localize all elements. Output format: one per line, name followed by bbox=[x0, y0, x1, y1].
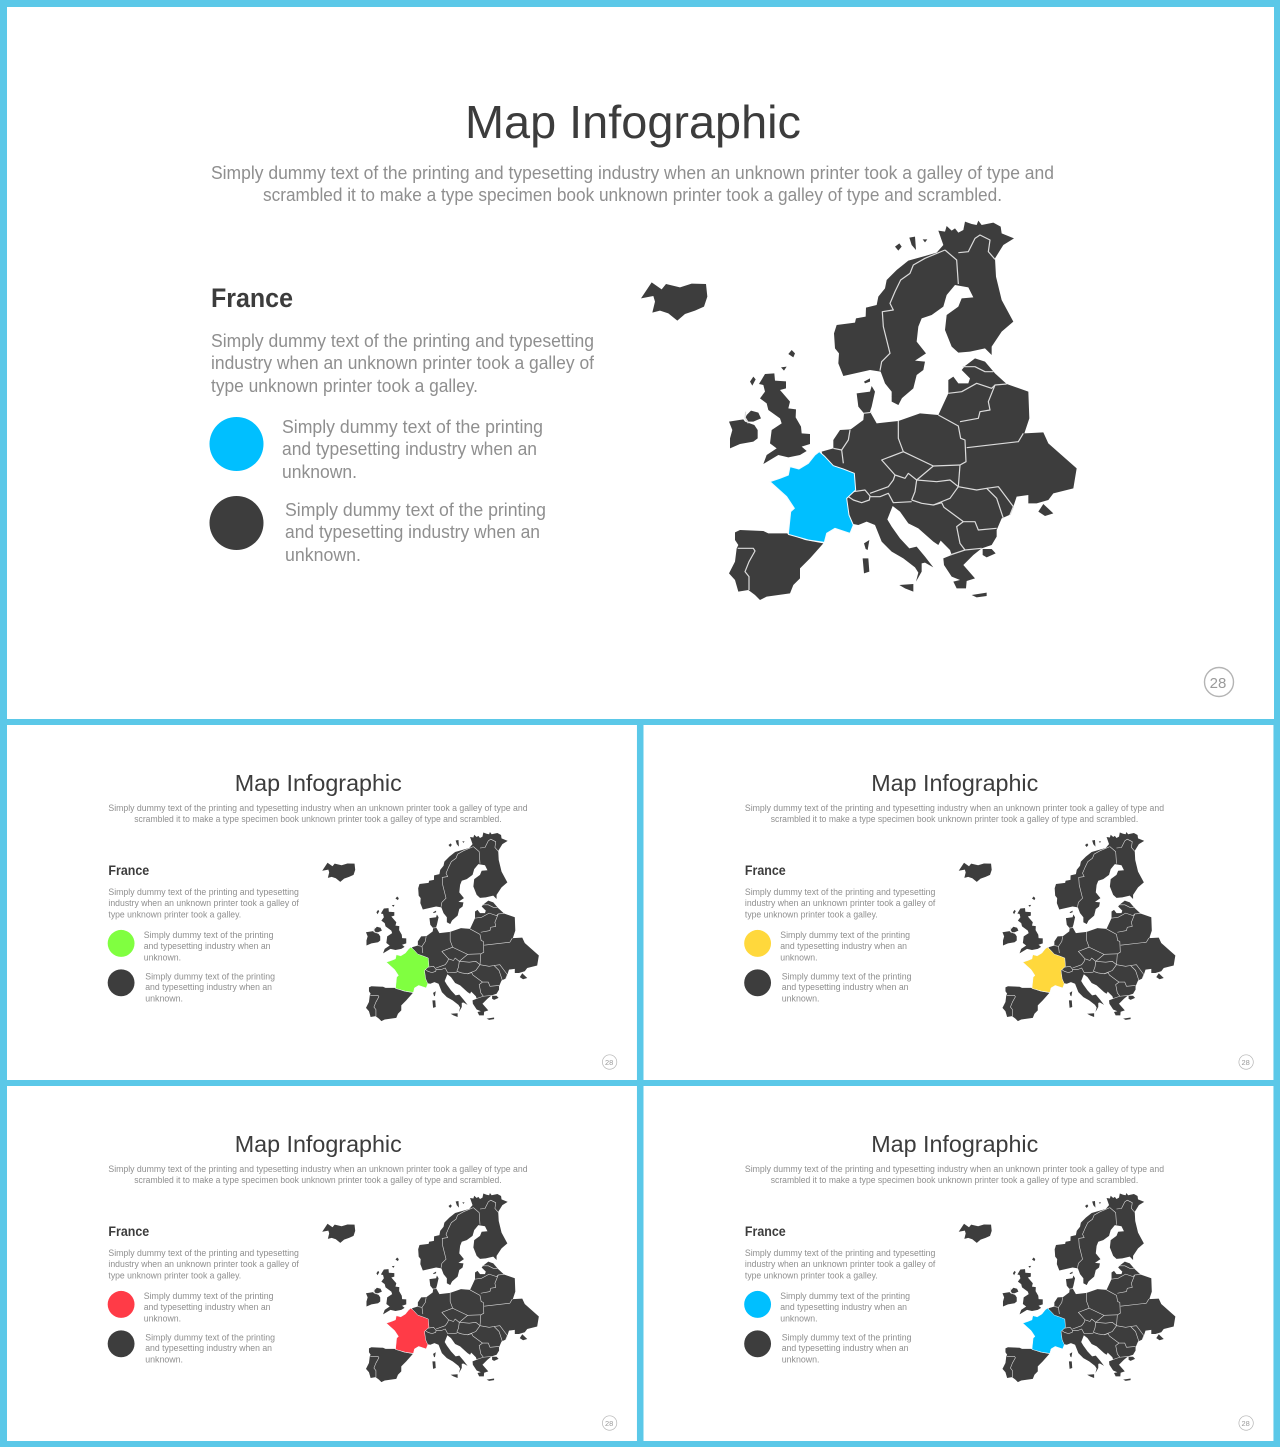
map of Europe bbox=[322, 1193, 539, 1382]
page number bbox=[602, 1416, 617, 1430]
title: Map Infographic bbox=[871, 1131, 1038, 1157]
legend item: dark bbox=[108, 1330, 275, 1365]
page number: 28 bbox=[1241, 1058, 1250, 1067]
legend item: highlight: unknown. bbox=[144, 952, 181, 962]
legend item: highlight: unknown. bbox=[780, 952, 818, 962]
legend item: highlight: Simply dummy text of the printing bbox=[282, 417, 543, 437]
country description: industry when an unknown printer took a galley of bbox=[211, 353, 595, 373]
legend item: highlight bbox=[744, 930, 910, 962]
legend item: highlight: Simply dummy text of the printing bbox=[144, 1291, 274, 1301]
map of Europe bbox=[959, 832, 1175, 1021]
legend item: highlight: Simply dummy text of the printing bbox=[780, 930, 910, 940]
subtitle bbox=[745, 803, 1164, 824]
country description: industry when an unknown printer took a galley of bbox=[108, 1259, 299, 1269]
country description: Simply dummy text of the printing and typesetting bbox=[108, 887, 299, 897]
subtitle: Simply dummy text of the printing and typesetting industry when an unknown printer took a galley of type and bbox=[745, 1164, 1164, 1174]
subtitle: Simply dummy text of the printing and typesetting industry when an unknown printer took a galley of type and bbox=[211, 163, 1054, 183]
country heading: France bbox=[211, 283, 293, 313]
title: Map Infographic bbox=[465, 96, 801, 148]
legend item: dark: unknown. bbox=[782, 1355, 820, 1365]
legend item: dark: and typesetting industry when an bbox=[145, 982, 272, 992]
country description: industry when an unknown printer took a galley of bbox=[745, 898, 936, 908]
legend item: highlight bbox=[210, 417, 543, 482]
country description: type unknown printer took a galley. bbox=[108, 909, 241, 919]
subtitle: scrambled it to make a type specimen book unknown printer took a galley of type and scrambled. bbox=[263, 185, 1002, 205]
legend item: highlight: Simply dummy text of the printing bbox=[144, 930, 274, 940]
country description bbox=[211, 331, 595, 396]
legend item: highlight: unknown. bbox=[780, 1313, 818, 1323]
page number bbox=[602, 1055, 617, 1069]
legend item: dark: unknown. bbox=[145, 1355, 183, 1365]
legend item: dark bbox=[108, 969, 275, 1004]
country heading: France bbox=[108, 863, 150, 878]
legend item: dark: Simply dummy text of the printing bbox=[285, 500, 546, 520]
subtitle: scrambled it to make a type specimen book unknown printer took a galley of type and scrambled. bbox=[771, 814, 1138, 824]
country heading: France bbox=[745, 863, 786, 878]
country description bbox=[108, 887, 299, 919]
panel: small slide yellow bbox=[644, 725, 1273, 1080]
country heading: France bbox=[108, 1224, 150, 1239]
subtitle: Simply dummy text of the printing and typesetting industry when an unknown printer took a galley of type and bbox=[745, 803, 1164, 813]
legend item: highlight bbox=[108, 930, 274, 962]
subtitle: Simply dummy text of the printing and typesetting industry when an unknown printer took a galley of type and bbox=[108, 1164, 528, 1174]
subtitle bbox=[211, 163, 1054, 205]
legend item: highlight: and typesetting industry when an bbox=[780, 1302, 907, 1312]
legend item: highlight: Simply dummy text of the printing bbox=[780, 1291, 910, 1301]
country description: Simply dummy text of the printing and typesetting bbox=[211, 331, 594, 351]
legend item: dark: unknown. bbox=[145, 994, 183, 1004]
page number: 28 bbox=[1241, 1419, 1250, 1428]
legend item: highlight: and typesetting industry when an bbox=[144, 1302, 271, 1312]
legend item: dark: unknown. bbox=[285, 545, 361, 565]
subtitle: scrambled it to make a type specimen book unknown printer took a galley of type and scrambled. bbox=[134, 814, 502, 824]
page number bbox=[1204, 668, 1234, 696]
country heading: France bbox=[745, 1224, 786, 1239]
page number: 28 bbox=[605, 1419, 613, 1428]
map of Europe bbox=[959, 1193, 1175, 1382]
legend item: dark: and typesetting industry when an bbox=[782, 1343, 909, 1353]
legend item: dark bbox=[210, 496, 546, 565]
legend item: highlight: unknown. bbox=[282, 462, 357, 482]
legend item: highlight: and typesetting industry when an bbox=[144, 941, 271, 951]
country description: Simply dummy text of the printing and typesetting bbox=[745, 1248, 935, 1258]
title: Map Infographic bbox=[235, 1131, 402, 1157]
subtitle: scrambled it to make a type specimen book unknown printer took a galley of type and scrambled. bbox=[134, 1175, 502, 1185]
country description: type unknown printer took a galley. bbox=[108, 1270, 241, 1280]
legend item: dark bbox=[744, 1330, 911, 1365]
page number: 28 bbox=[1210, 675, 1226, 692]
country description: industry when an unknown printer took a galley of bbox=[745, 1259, 936, 1269]
panel: main slide blue bbox=[7, 7, 1274, 719]
subtitle bbox=[745, 1164, 1164, 1185]
legend item: dark: unknown. bbox=[782, 994, 820, 1004]
panel: small slide red bbox=[7, 1086, 637, 1441]
country description bbox=[745, 887, 936, 919]
map of Europe bbox=[641, 221, 1077, 600]
subtitle bbox=[108, 803, 528, 824]
map of Europe bbox=[322, 832, 539, 1021]
country description bbox=[108, 1248, 299, 1280]
country description: type unknown printer took a galley. bbox=[745, 909, 878, 919]
title: Map Infographic bbox=[871, 770, 1038, 796]
title: Map Infographic bbox=[235, 770, 402, 796]
panel: small slide blue bbox=[644, 1086, 1273, 1441]
legend item: highlight: and typesetting industry when an bbox=[282, 439, 537, 459]
legend item: dark: and typesetting industry when an bbox=[145, 1343, 272, 1353]
legend item: dark: and typesetting industry when an bbox=[782, 982, 909, 992]
legend item: dark bbox=[744, 969, 911, 1004]
panel: small slide green bbox=[7, 725, 637, 1080]
subtitle bbox=[108, 1164, 528, 1185]
subtitle: scrambled it to make a type specimen book unknown printer took a galley of type and scrambled. bbox=[771, 1175, 1138, 1185]
legend item: dark: Simply dummy text of the printing bbox=[145, 971, 275, 981]
subtitle: Simply dummy text of the printing and typesetting industry when an unknown printer took a galley of type and bbox=[108, 803, 528, 813]
legend item: highlight: unknown. bbox=[144, 1313, 181, 1323]
page number bbox=[1239, 1055, 1253, 1069]
country description bbox=[745, 1248, 936, 1280]
country description: type unknown printer took a galley. bbox=[211, 376, 478, 396]
country description: Simply dummy text of the printing and typesetting bbox=[745, 887, 935, 897]
country description: type unknown printer took a galley. bbox=[745, 1270, 878, 1280]
legend item: dark: Simply dummy text of the printing bbox=[782, 1332, 911, 1342]
legend item: dark: and typesetting industry when an bbox=[285, 522, 540, 542]
country description: Simply dummy text of the printing and typesetting bbox=[108, 1248, 299, 1258]
page number bbox=[1239, 1416, 1253, 1430]
legend item: highlight bbox=[744, 1291, 910, 1323]
legend item: highlight: and typesetting industry when an bbox=[780, 941, 907, 951]
page number: 28 bbox=[605, 1058, 613, 1067]
legend item: highlight bbox=[108, 1291, 274, 1323]
legend item: dark: Simply dummy text of the printing bbox=[782, 971, 911, 981]
country description: industry when an unknown printer took a galley of bbox=[108, 898, 299, 908]
legend item: dark: Simply dummy text of the printing bbox=[145, 1332, 275, 1342]
